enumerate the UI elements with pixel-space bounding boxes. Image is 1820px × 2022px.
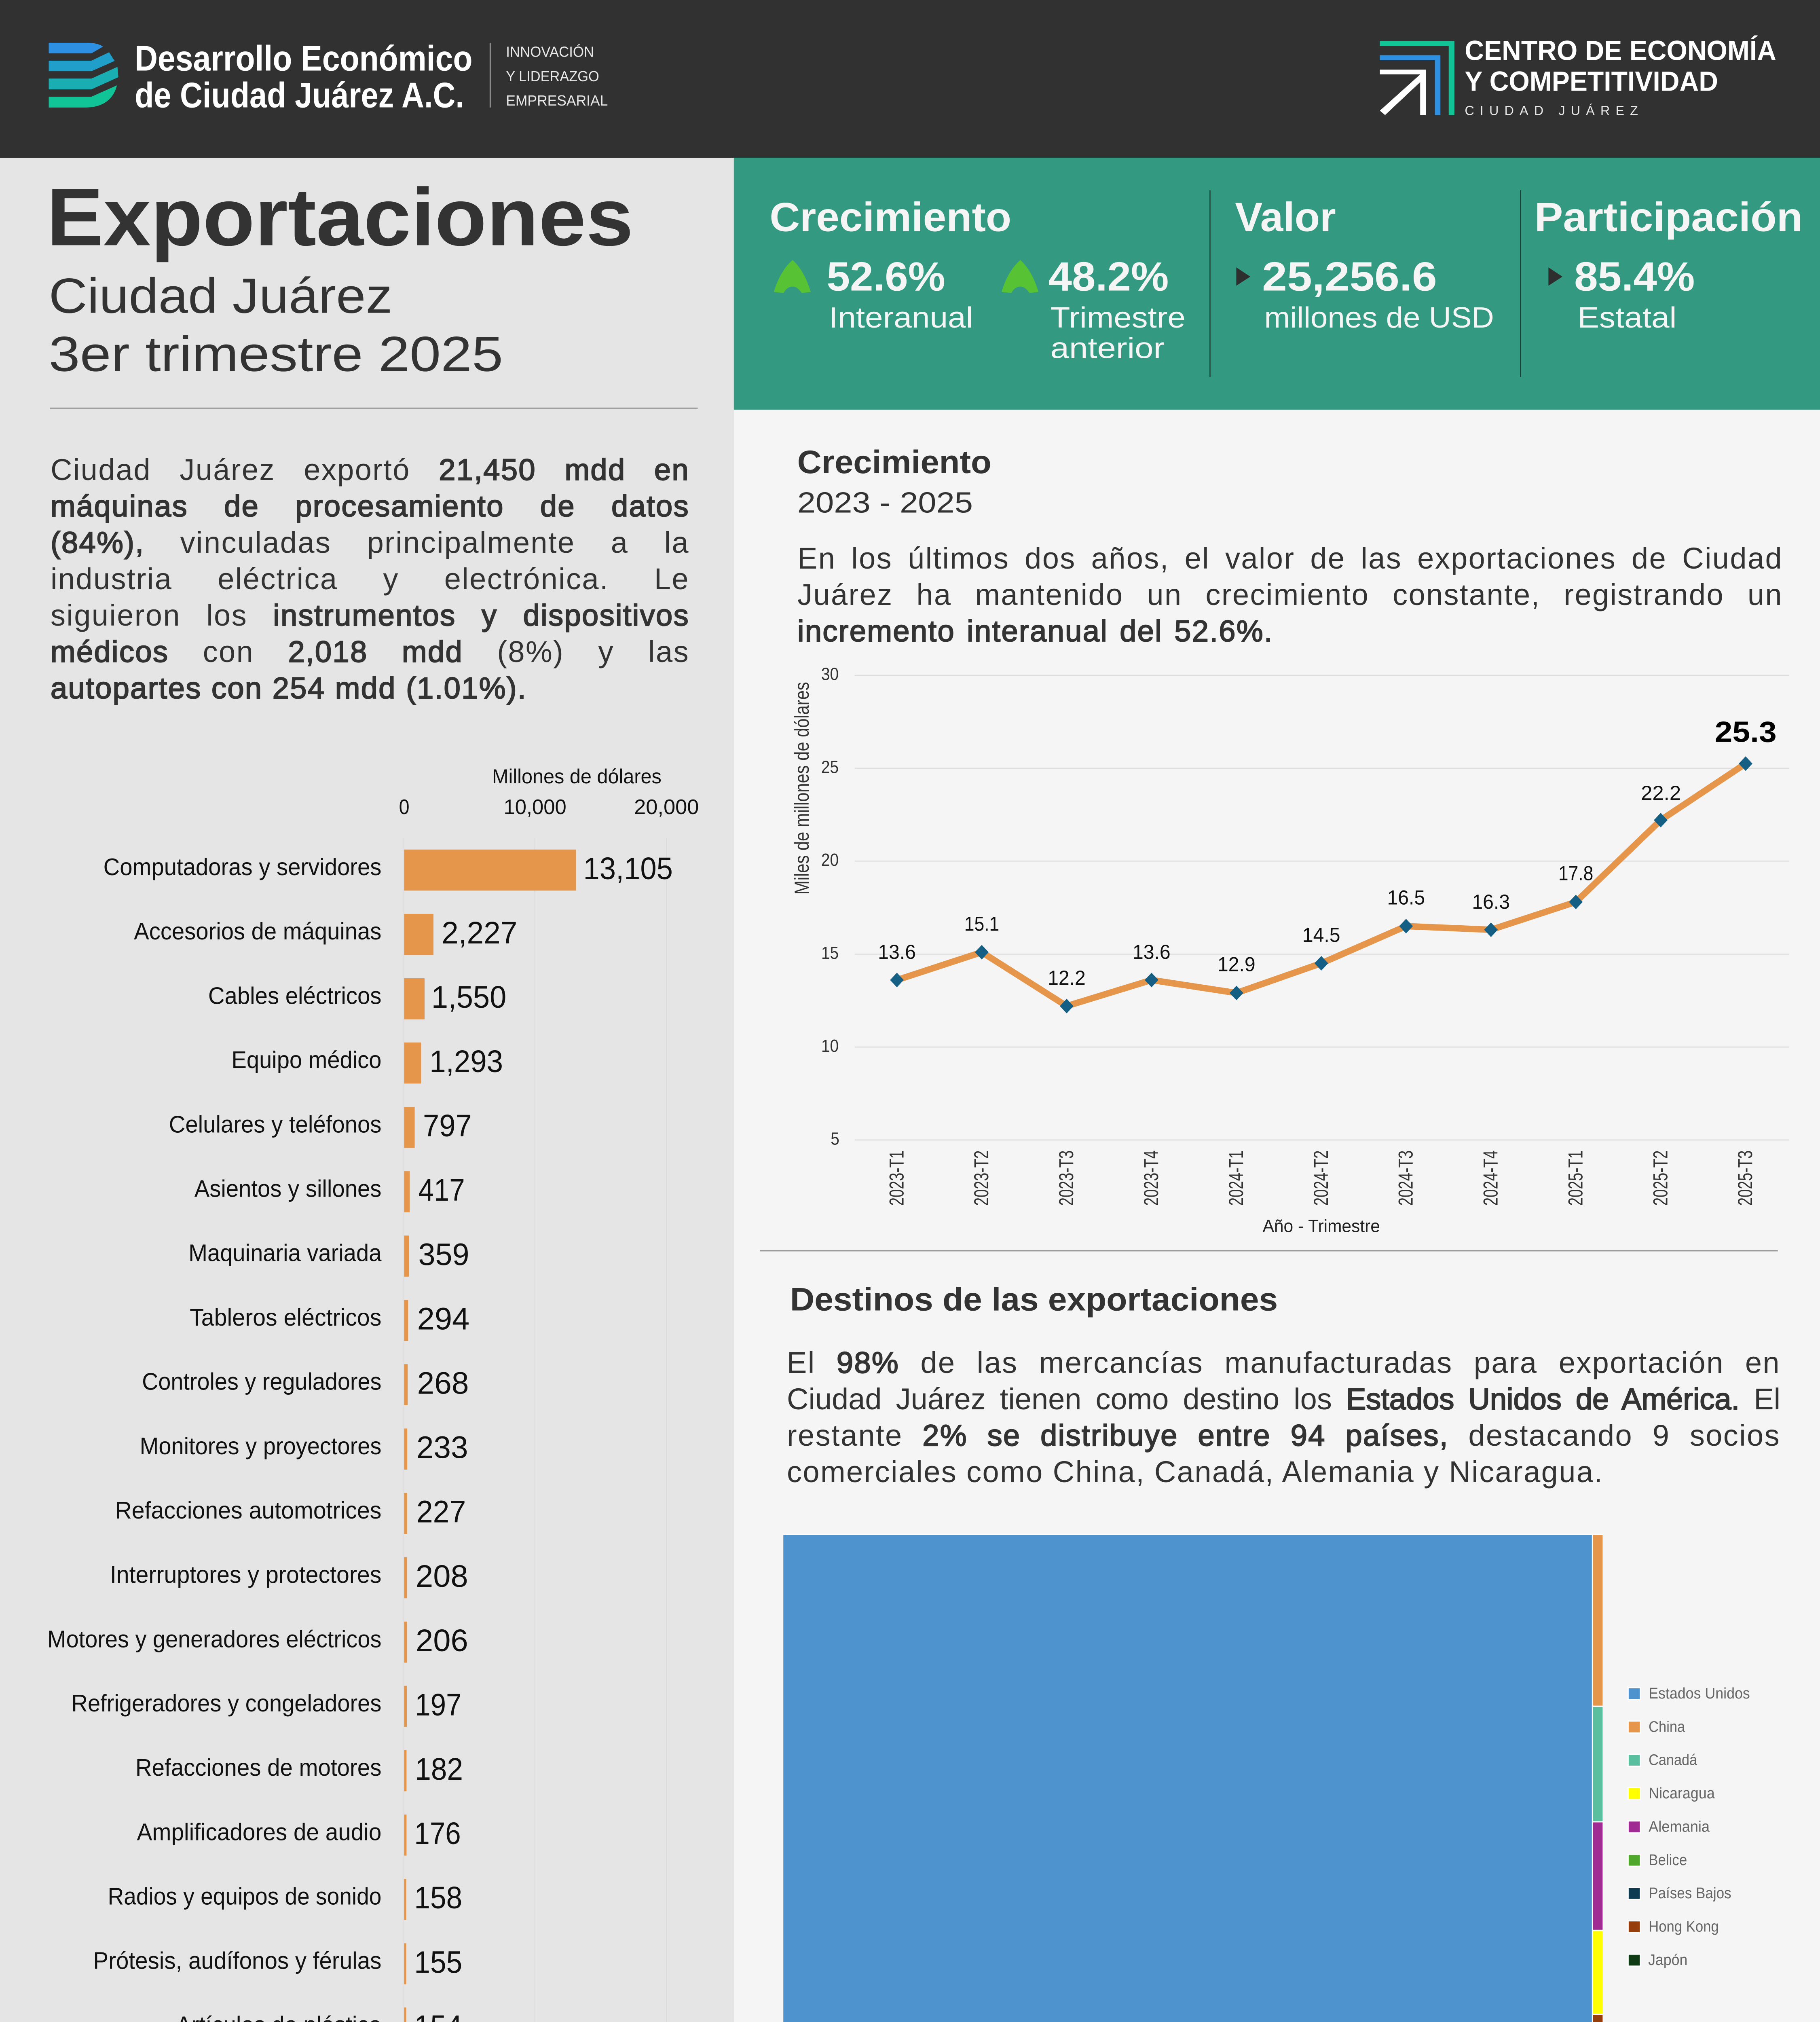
logo city: CIUDAD JUÁREZ [1465, 103, 1638, 118]
text block: crecimiento: incremento interanual del 52.6%. [797, 614, 1273, 648]
bar values: 197 [415, 1688, 461, 1722]
bar values: 359 [419, 1237, 469, 1272]
x axis labels: 2024-T1 [1224, 1151, 1247, 1206]
text block: crecimiento [797, 540, 1783, 649]
text block: resumen de exportaciones: médicos con 2,018 mdd (8%) y las [51, 635, 689, 668]
logo wordmark [1465, 36, 1776, 97]
text block: resumen de exportaciones: (84%), vinculadas principalmente a la [51, 526, 689, 559]
treemap legend: Hong Kong [1649, 1918, 1719, 1935]
bar category labels [47, 853, 382, 2022]
KPI: Crecimiento: Crecimiento [769, 195, 1011, 240]
heading: Crecimiento: Crecimiento [797, 444, 991, 480]
bar values: 176 [414, 1816, 461, 1851]
subtitle: 3er trimestre 2025 [49, 326, 503, 381]
x axis labels: 2023-T2 [970, 1151, 993, 1206]
grid lines and y axis: 5 [831, 1129, 839, 1149]
x axis labels: 2024-T2 [1309, 1151, 1332, 1206]
treemap small cells [1593, 1535, 1602, 2022]
data labels: 25.3 [1715, 716, 1777, 748]
grid lines and y axis: 10 [821, 1036, 839, 1056]
title: Exportaciones [47, 171, 633, 262]
bar category labels: Motores y generadores eléctricos [47, 1625, 381, 1652]
bar chart axis [399, 765, 699, 2022]
bar category labels: Amplificadores de audio [137, 1818, 381, 1845]
KPI: Valor: Valor [1235, 195, 1336, 240]
bar values: 158 [414, 1880, 462, 1915]
logo tagline: EMPRESARIAL [506, 92, 608, 109]
grid lines and y axis: Miles de millones de dólares [790, 682, 813, 895]
treemap legend: Alemania [1649, 1818, 1710, 1835]
text block: crecimiento: En los últimos dos años, el valor de las exportaciones de Ciudad [797, 541, 1783, 575]
x axis labels: 2023-T4 [1139, 1151, 1163, 1206]
bar category labels: Prótesis, audífonos y férulas [93, 1947, 381, 1974]
text block: destinos: El 98% de las mercancías manufacturadas para exportación en [787, 1346, 1780, 1379]
bar values: 233 [416, 1430, 468, 1465]
grid lines and y axis [790, 665, 1789, 1149]
text block: resumen de exportaciones: Ciudad Juárez exportó 21,450 mdd en [51, 453, 689, 486]
heading: Destinos de las exportaciones: Destinos de las exportaciones [790, 1282, 1278, 1318]
bar category labels: Monitores y proyectores [140, 1432, 381, 1459]
text block: crecimiento: Juárez ha mantenido un crecimiento constante, registrando un [797, 578, 1783, 611]
logo tagline: INNOVACIÓN [506, 43, 594, 60]
bar category labels: Refacciones de motores [135, 1754, 381, 1781]
bar values: 268 [417, 1366, 469, 1400]
icon: up arrow [774, 260, 811, 293]
data labels: 17.8 [1558, 862, 1593, 885]
treemap legend: Nicaragua [1649, 1785, 1715, 1802]
bar values: 208 [416, 1559, 468, 1594]
grid lines and y axis: 15 [821, 943, 839, 963]
KPI: Participación: 85.4% [1574, 254, 1695, 300]
icon: striped D [49, 43, 118, 108]
bar category labels: Cables eléctricos [208, 982, 381, 1009]
treemap legend: China [1649, 1718, 1685, 1735]
KPI: Crecimiento: 52.6% [827, 254, 945, 300]
logo wordmark [135, 38, 472, 115]
bar category labels: Celulares y teléfonos [169, 1110, 381, 1138]
treemap legend: Países Bajos [1649, 1885, 1731, 1902]
KPI: Participación: Estatal [1577, 302, 1676, 334]
bar category labels: Tableros eléctricos [190, 1304, 381, 1331]
bar values: 1,293 [429, 1044, 503, 1079]
KPI: Crecimiento: 48.2% [1048, 254, 1169, 300]
bar values: 2,227 [442, 916, 517, 950]
x axis labels: Año - Trimestre [1263, 1216, 1380, 1236]
x axis labels: 2025-T3 [1733, 1151, 1757, 1206]
KPI: Crecimiento: Trimestre [1051, 302, 1186, 334]
bar chart axis: Millones de dólares [492, 765, 662, 788]
text block: resumen de exportaciones: siguieron los instrumentos y dispositivos [51, 599, 689, 632]
logo wordmark: de Ciudad Juárez A.C. [135, 75, 464, 115]
text block: destinos: comerciales como China, Canadá, Alemania y Nicaragua. [787, 1455, 1603, 1489]
data labels: 14.5 [1302, 923, 1340, 946]
heading: Crecimiento: 2023 - 2025 [797, 486, 973, 519]
text block: resumen de exportaciones: máquinas de procesamiento de datos [51, 489, 689, 523]
logo tagline [506, 43, 608, 109]
grid lines and y axis: 20 [821, 850, 839, 870]
x axis labels: 2023-T3 [1055, 1151, 1078, 1206]
logo wordmark: Desarrollo Económico [135, 38, 472, 78]
KPI: Participación: Participación [1535, 195, 1803, 240]
header band [0, 0, 1820, 158]
icon: up arrow [1002, 260, 1038, 293]
heading: Crecimiento [797, 444, 991, 519]
logo: Desarrollo Económico [49, 38, 608, 115]
logo: Centro de Economía [1380, 36, 1776, 118]
KPI: Crecimiento [769, 195, 1186, 364]
right panel background [734, 409, 1820, 2022]
KPI: Crecimiento: anterior [1051, 332, 1165, 364]
treemap legend: Belice [1649, 1852, 1687, 1869]
data labels: 12.9 [1218, 952, 1256, 975]
bar category labels: Refrigeradores y congeladores [71, 1690, 381, 1717]
panel: KPI band [734, 158, 1820, 410]
grid lines and y axis: 25 [821, 757, 839, 777]
data labels: 16.5 [1387, 886, 1425, 909]
text block: resumen de exportaciones [51, 452, 689, 706]
data labels: 22.2 [1641, 781, 1681, 804]
bar category labels: Refacciones automotrices [115, 1497, 381, 1524]
bar category labels: Radios y equipos de sonido [108, 1883, 381, 1910]
data labels [878, 716, 1777, 989]
bar category labels: Interruptores y protectores [110, 1561, 381, 1588]
bar chart axis: 10,000 [504, 795, 567, 819]
bar values: 1,550 [431, 980, 506, 1015]
x axis labels: 2023-T1 [885, 1151, 908, 1206]
bar category labels: Accesorios de máquinas [134, 918, 381, 945]
bar values: 206 [416, 1623, 468, 1658]
data labels: 13.6 [878, 940, 916, 963]
bars [404, 850, 576, 2022]
bar values: 155 [414, 1945, 462, 1980]
x axis labels: 2025-T1 [1564, 1151, 1587, 1206]
treemap: destinos [783, 1534, 1603, 2022]
text block: resumen de exportaciones: autopartes con 254 mdd (1.01%). [51, 671, 527, 705]
bar category labels: Equipo médico [232, 1046, 381, 1073]
logo wordmark: Y COMPETITIVIDAD [1465, 66, 1718, 97]
KPI: Valor: 25,256.6 [1262, 254, 1437, 300]
bar values: 797 [423, 1108, 472, 1143]
x axis labels: 2025-T2 [1649, 1151, 1672, 1206]
treemap legend [1628, 1685, 1750, 1969]
bar category labels: Asientos y sillones [194, 1175, 381, 1202]
bar values [414, 851, 673, 2022]
treemap cell: Estados Unidos [783, 1535, 1592, 2022]
text block: destinos: Ciudad Juárez tienen como destino los Estados Unidos de América. El [787, 1382, 1780, 1416]
text block: resumen de exportaciones: industria eléctrica y electrónica. Le [51, 562, 689, 596]
data markers [890, 756, 1752, 1013]
bar category labels: Computadoras y servidores [104, 853, 381, 880]
data labels: 15.1 [964, 912, 999, 935]
bar category labels: Controles y reguladores [142, 1368, 381, 1395]
title block [47, 171, 633, 381]
subtitle [49, 268, 503, 381]
text block: destinos [787, 1345, 1780, 1490]
treemap legend: Canadá [1649, 1752, 1697, 1769]
x axis labels: 2024-T4 [1479, 1151, 1502, 1206]
icon: right triangle [1548, 267, 1562, 286]
x axis labels [885, 1151, 1757, 1236]
bar category labels: Maquinaria variada [188, 1239, 382, 1267]
text block: destinos: restante 2% se distribuye entre 94 países, destacando 9 socios [787, 1419, 1780, 1452]
bar chart axis: 20,000 [634, 795, 699, 819]
KPI: Participación [1535, 195, 1803, 334]
bar chart: productos exportados [47, 765, 699, 2022]
icon: nested arrows [1380, 41, 1454, 115]
data labels: 12.2 [1048, 966, 1086, 989]
subtitle: Ciudad Juárez [49, 268, 392, 323]
icon: right triangle [1236, 267, 1250, 286]
KPI: Valor [1235, 195, 1494, 334]
bar chart axis: 0 [399, 795, 410, 819]
data labels: 13.6 [1133, 940, 1171, 963]
data labels: 16.3 [1472, 890, 1510, 913]
grid lines and y axis: 30 [821, 665, 839, 684]
data line [897, 764, 1746, 1006]
bar values: 294 [417, 1302, 469, 1337]
KPI: Crecimiento: Interanual [829, 302, 973, 334]
bar values: 227 [416, 1495, 466, 1529]
bar values: 13,105 [583, 851, 673, 886]
logo tagline: Y LIDERAZGO [506, 68, 599, 85]
KPI: Valor: millones de USD [1264, 302, 1494, 334]
bar values: 182 [415, 1752, 463, 1787]
treemap legend: Japón [1648, 1952, 1687, 1969]
bar values: 417 [419, 1173, 465, 1208]
x axis labels: 2024-T3 [1394, 1151, 1417, 1206]
logo wordmark: CENTRO DE ECONOMÍA [1465, 36, 1776, 66]
treemap legend: Estados Unidos [1649, 1685, 1750, 1702]
line chart: crecimiento [790, 665, 1789, 1236]
left panel background [0, 157, 734, 2022]
